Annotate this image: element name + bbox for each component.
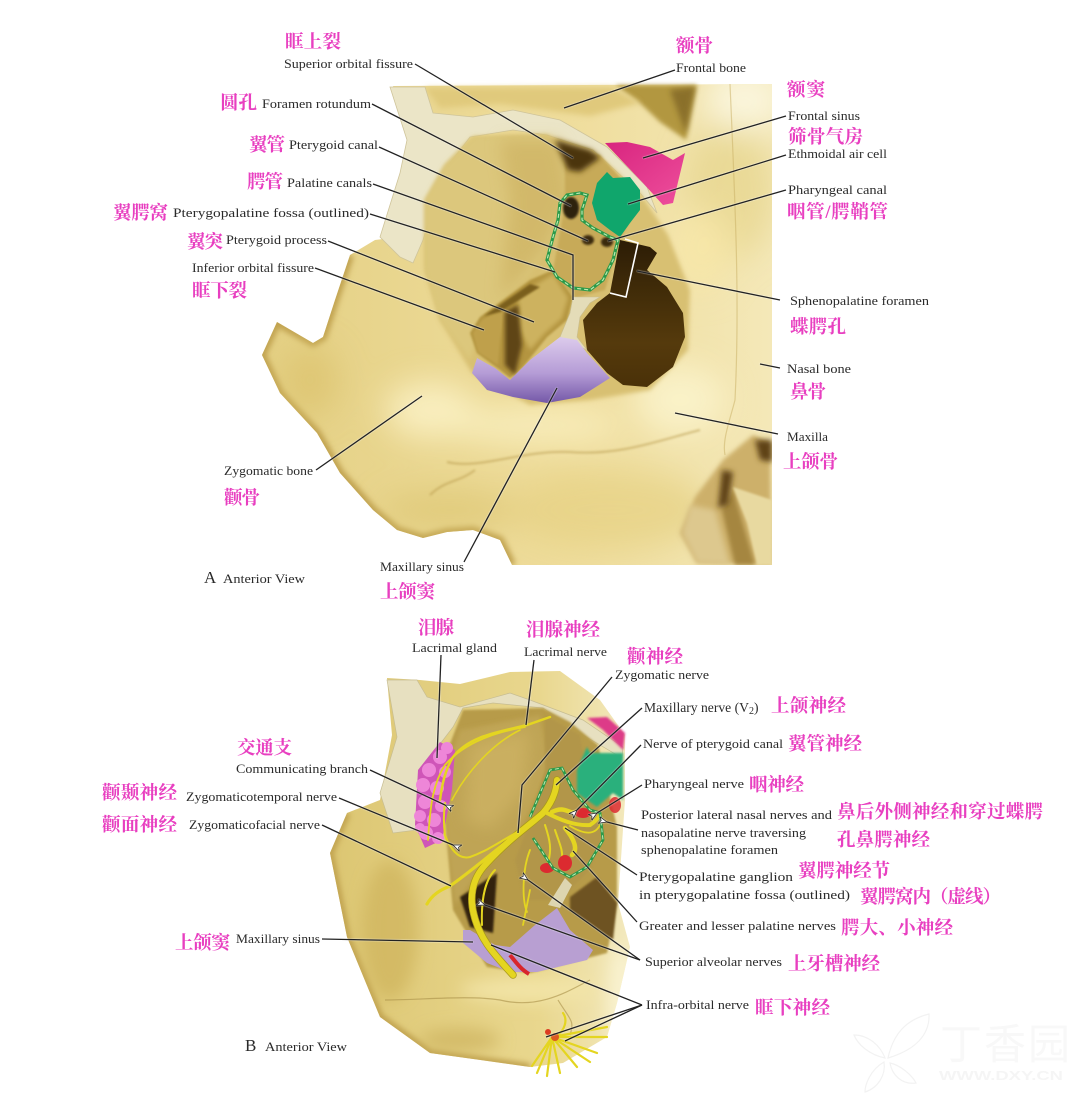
label: pterygopalatine fossa xyxy=(113,202,369,224)
orbit cavity xyxy=(425,135,690,405)
label: maxilla xyxy=(783,430,838,473)
maxillary sinus purple wall xyxy=(472,337,610,403)
lower right teeth recess xyxy=(680,435,772,565)
label: palatine canals: 腭管 xyxy=(247,171,283,193)
label: infra-orbital nerve xyxy=(646,998,830,1019)
label: foramen rotundum: 圆孔 xyxy=(220,93,257,114)
label: posterior lateral nasal nerves: sphenopalatine foramen xyxy=(641,843,779,857)
label: frontal bone xyxy=(675,36,746,75)
label: zygomaticotemporal nerve: 颧颞神经 xyxy=(102,782,177,804)
ethmoid green xyxy=(577,747,623,807)
label: maxillary sinus xyxy=(175,932,320,954)
caption: A anterior view: Anterior View xyxy=(223,572,305,586)
label: zygomatic nerve: Zygomatic nerve xyxy=(615,668,709,682)
label: pterygoid process xyxy=(187,232,327,253)
label: communicating branch: 交通支 xyxy=(237,738,292,759)
label: foramen rotundum: Foramen rotundum xyxy=(262,97,371,111)
suture lines xyxy=(385,980,590,1035)
sphenopalatine foramen bracket xyxy=(610,239,638,297)
label: superior orbital fissure: Superior orbital fissure xyxy=(284,57,413,71)
label: infra-orbital nerve: Infra-orbital nerve xyxy=(646,998,749,1012)
label: superior orbital fissure xyxy=(284,32,413,71)
label: maxillary nerve: ) xyxy=(754,700,758,716)
label: pterygopalatine ganglion: 翼腭窝内（虚线） xyxy=(860,886,1001,908)
suture and creases xyxy=(430,430,700,495)
label: lacrimal nerve: Lacrimal nerve xyxy=(524,645,607,659)
label: zygomaticotemporal nerve xyxy=(102,782,337,804)
label: frontal sinus: Frontal sinus xyxy=(788,109,860,123)
label: inferior orbital fissure: 眶下裂 xyxy=(192,281,247,302)
label: pterygopalatine fossa: Pterygopalatine fossa (outlined) xyxy=(173,206,369,220)
label: zygomaticotemporal nerve: Zygomaticotemporal nerve xyxy=(186,790,337,804)
dark fissure xyxy=(460,873,497,933)
label: communicating branch xyxy=(236,738,369,776)
label: maxillary sinus xyxy=(380,560,464,603)
superior orbital fissure xyxy=(555,140,600,172)
label: lacrimal gland: Lacrimal gland xyxy=(412,641,498,655)
label: infra-orbital nerve: 眶下神经 xyxy=(755,998,830,1019)
right dark cavity xyxy=(570,877,617,940)
label: maxillary nerve xyxy=(644,696,846,717)
labels panel A xyxy=(113,32,930,603)
bone base xyxy=(262,84,772,565)
label: pharyngeal canal: 咽管/腭鞘管 xyxy=(787,201,888,223)
medial wall xyxy=(515,715,605,900)
watermark url: WWW.DXY.CN xyxy=(939,1068,1063,1083)
label: pharyngeal canal: Pharyngeal canal xyxy=(788,183,888,197)
label: frontal sinus: 额窦 xyxy=(786,79,825,101)
label: pharyngeal canal xyxy=(787,183,888,223)
label: superior orbital fissure: 眶上裂 xyxy=(285,32,341,53)
label: nasal bone: Nasal bone xyxy=(787,362,852,376)
maxillary sinus purple wall xyxy=(463,908,593,972)
label: nasal bone xyxy=(787,362,852,403)
pterygoid canal holes xyxy=(582,235,594,245)
label: nasal bone: 鼻骨 xyxy=(790,382,826,403)
bone shading xyxy=(262,70,785,565)
label: lacrimal nerve xyxy=(524,620,607,659)
label: maxilla: Maxilla xyxy=(787,430,828,444)
cream supraorbital rim xyxy=(380,87,657,263)
label: ethmoidal air cell xyxy=(788,126,888,161)
label: superior alveolar nerves xyxy=(645,954,880,975)
watermark flower xyxy=(854,1014,929,1092)
red vessels xyxy=(540,797,621,873)
label: sphenopalatine foramen xyxy=(790,294,930,338)
label: frontal sinus xyxy=(786,79,860,123)
caption: A anterior view: A xyxy=(204,568,217,587)
label: sphenopalatine foramen: Sphenopalatine foramen xyxy=(790,294,930,308)
label: nerve of pterygoid canal: Nerve of pterygoid canal xyxy=(643,737,784,751)
label: pharyngeal nerve: 咽神经 xyxy=(749,775,804,796)
label: greater and lesser palatine nerves xyxy=(639,918,953,939)
label: palatine canals xyxy=(247,171,372,193)
label: maxillary sinus: Maxillary sinus xyxy=(380,560,464,574)
label: maxillary nerve: 2 xyxy=(749,706,754,717)
pterygopalatine fossa dashed outline xyxy=(530,768,603,877)
leader lines panel B xyxy=(322,655,642,1041)
label: lacrimal gland xyxy=(412,618,498,655)
cream vomer strip xyxy=(548,878,572,908)
label: pterygoid canal: Pterygoid canal xyxy=(289,138,379,152)
label: inferior orbital fissure xyxy=(192,261,314,302)
label: posterior lateral nasal nerves: 孔鼻腭神经 xyxy=(837,830,930,851)
label: maxillary nerve: Maxillary nerve (V xyxy=(644,700,749,715)
frontal sinus pink xyxy=(605,142,685,205)
panel B: nerve anatomy illustration xyxy=(330,671,636,1076)
label: zygomatic bone: 颧骨 xyxy=(224,487,260,509)
label: maxilla: 上颌骨 xyxy=(783,452,838,473)
label: posterior lateral nasal nerves: Posterior lateral nasal nerves and xyxy=(641,808,833,822)
label: pterygoid process: Pterygoid process xyxy=(226,233,327,247)
label: greater and lesser palatine nerves: 腭大、小神经 xyxy=(841,918,953,939)
label: lacrimal nerve: 泪腺神经 xyxy=(526,620,600,641)
label: zygomatic bone xyxy=(224,464,313,509)
label: foramen rotundum xyxy=(220,93,371,114)
caption: B anterior view xyxy=(245,1036,347,1055)
bone base xyxy=(330,671,630,1067)
bone shading xyxy=(330,813,636,1067)
red artery xyxy=(510,955,529,974)
labels panel B xyxy=(102,618,1043,1055)
label: lacrimal gland: 泪腺 xyxy=(418,618,454,639)
foramen rotundum xyxy=(563,197,579,219)
label: posterior lateral nasal nerves: 鼻后外侧神经和穿过蝶腭 xyxy=(837,801,1043,823)
label: posterior lateral nasal nerves xyxy=(641,801,1043,857)
caption: B anterior view: Anterior View xyxy=(265,1040,347,1054)
medial wall xyxy=(553,150,640,298)
lateral orbital wall xyxy=(445,715,550,905)
caption: B anterior view: B xyxy=(245,1036,256,1055)
label: zygomaticofacial nerve: Zygomaticofacial nerve xyxy=(189,818,320,832)
label: palatine canals: Palatine canals xyxy=(287,176,372,190)
orbit cavity xyxy=(440,708,617,973)
label: zygomaticofacial nerve: 颧面神经 xyxy=(102,814,177,836)
pterygopalatine fossa dashed outline xyxy=(547,193,618,290)
vomer cream strip xyxy=(560,297,600,350)
lacrimal gland xyxy=(414,742,455,848)
caption: A anterior view xyxy=(204,568,305,587)
label: frontal bone: Frontal bone xyxy=(676,61,746,75)
label: zygomatic nerve: 颧神经 xyxy=(627,646,683,668)
label: pterygopalatine ganglion: in pterygopalatine fossa (outlined) xyxy=(639,888,850,902)
label: pterygopalatine ganglion: Pterygopalatine ganglion xyxy=(639,870,794,884)
label: pterygopalatine fossa: 翼腭窝 xyxy=(113,202,168,224)
label: ethmoidal air cell: 筛骨气房 xyxy=(788,126,863,148)
label: maxillary sinus: Maxillary sinus xyxy=(236,932,320,946)
label: ethmoidal air cell: Ethmoidal air cell xyxy=(788,147,888,161)
frontal bone shadow wedge xyxy=(615,85,697,140)
label: superior alveolar nerves: Superior alveolar nerves xyxy=(645,955,782,969)
label: superior alveolar nerves: 上牙槽神经 xyxy=(788,954,880,975)
nerves xyxy=(427,717,600,975)
label: pharyngeal nerve xyxy=(644,775,804,796)
label: pterygoid canal xyxy=(249,134,379,156)
inferior orbital fissure xyxy=(470,270,573,378)
nasal cavity opening xyxy=(583,240,685,387)
label: frontal bone: 额骨 xyxy=(675,36,713,57)
frontal sinus pink xyxy=(587,717,625,750)
label: communicating branch: Communicating branch xyxy=(236,762,369,776)
panel A: anterior view skull illustration xyxy=(262,70,785,565)
watermark: DXY logo xyxy=(854,1014,1070,1092)
watermark name: 丁香园 xyxy=(940,1021,1070,1068)
label: pterygopalatine ganglion xyxy=(639,860,1001,908)
ethmoidal air cell green xyxy=(592,172,640,237)
label: maxillary nerve: 上颌神经 xyxy=(771,696,846,717)
label: inferior orbital fissure: Inferior orbital fissure xyxy=(192,261,314,275)
label: zygomaticofacial nerve xyxy=(102,814,320,836)
cream orbital rim xyxy=(380,680,623,833)
label: maxillary sinus: 上颌窦 xyxy=(175,932,230,954)
label: zygomatic nerve xyxy=(615,646,709,682)
leader lines panel A xyxy=(315,64,786,562)
label: pterygoid process: 翼突 xyxy=(187,232,223,253)
label: maxillary sinus: 上颌窦 xyxy=(380,581,435,603)
label: posterior lateral nasal nerves: nasopalatine nerve traversing xyxy=(641,826,807,840)
label: pterygoid canal: 翼管 xyxy=(249,134,285,156)
label: nerve of pterygoid canal xyxy=(643,733,862,755)
label: pterygopalatine ganglion: 翼腭神经节 xyxy=(798,860,890,882)
label: greater and lesser palatine nerves: Greater and lesser palatine nerves xyxy=(639,919,836,933)
lateral orbital wall xyxy=(425,135,565,360)
label: nerve of pterygoid canal: 翼管神经 xyxy=(788,733,862,755)
pterygoid process xyxy=(518,274,568,350)
label: sphenopalatine foramen: 蝶腭孔 xyxy=(790,317,846,338)
infra-orbital nerve bundle xyxy=(532,1013,607,1076)
label: zygomatic bone: Zygomatic bone xyxy=(224,464,313,478)
label: pharyngeal nerve: Pharyngeal nerve xyxy=(644,777,745,791)
